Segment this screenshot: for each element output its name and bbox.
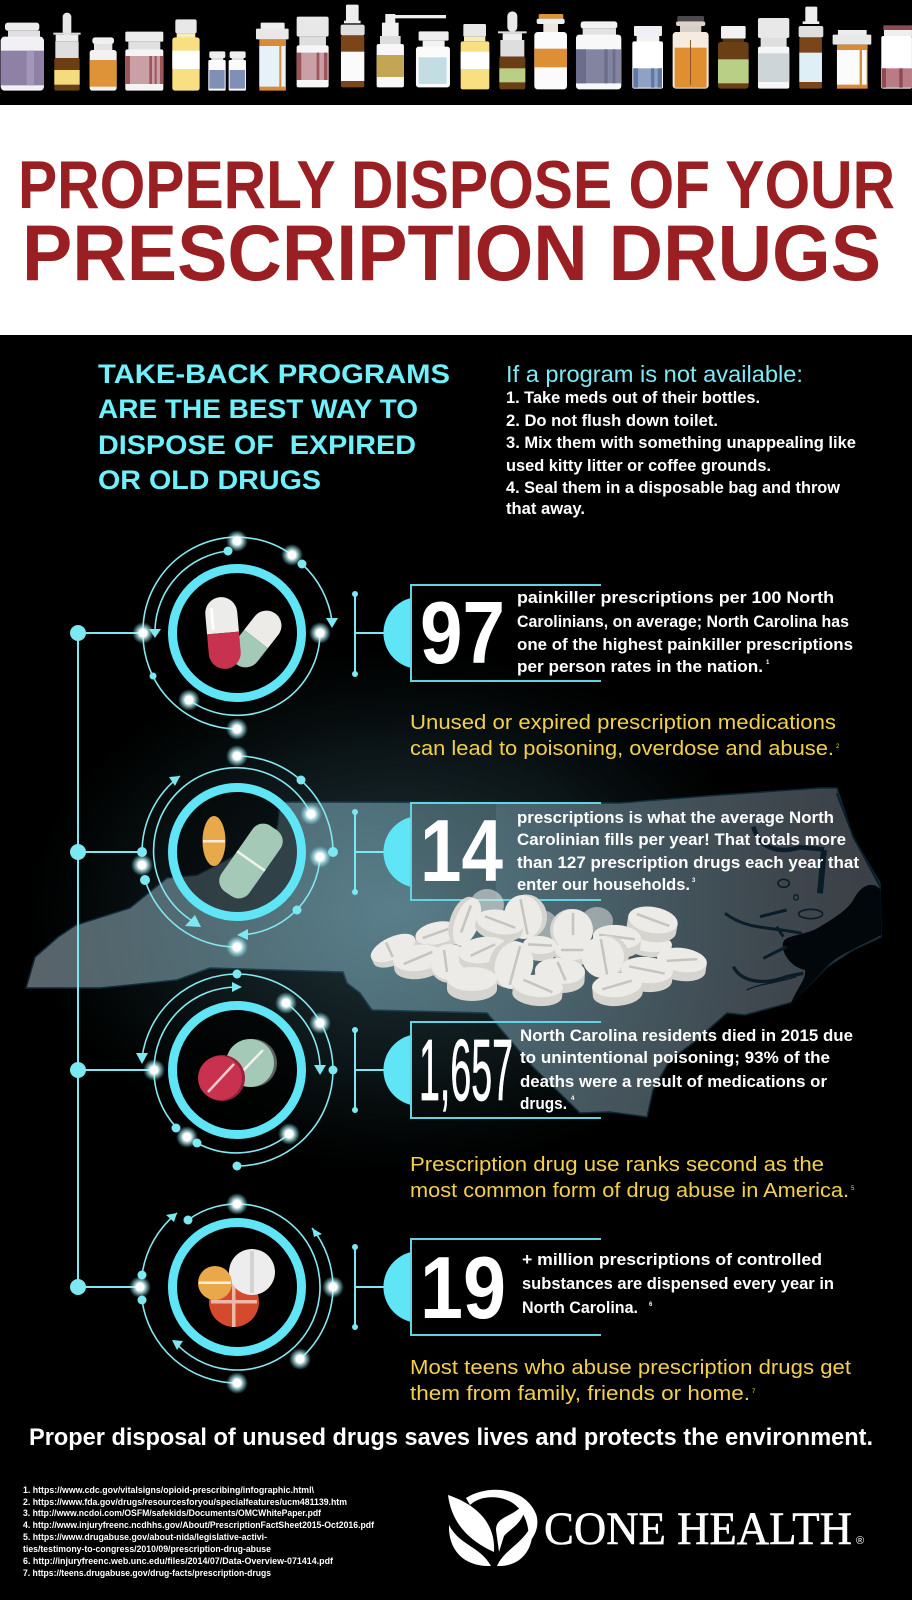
- stat 4: 19: substances are dispensed every year in: [522, 1274, 834, 1293]
- stat 2: 14: than 127 prescription drugs each year that: [517, 853, 859, 872]
- callout: unused medications: Unused or expired prescription medications: [410, 712, 836, 734]
- references list: 7. https://teens.drugabuse.gov/drug-facts/prescription-drugs: [23, 1568, 271, 1578]
- icon ring 1: capsules: [132, 530, 338, 740]
- heading: take-back programs: DISPOSE OF EXPIRED: [98, 430, 416, 460]
- references list: 3. http://www.ncdoi.com/OSFM/safekids/Documents/OMCWhitePaper.pdf: [23, 1508, 322, 1518]
- logo: Cone Health: ®: [856, 1535, 864, 1547]
- stat 1: 97: per person rates in the nation.: [517, 657, 763, 676]
- stat 3: 1,657: deaths were a result of medications or: [520, 1072, 827, 1091]
- stat 1: 97: one of the highest painkiller prescriptions: [517, 635, 853, 654]
- references list: [23, 1485, 375, 1578]
- icon: red cross tablet: [209, 1277, 259, 1327]
- icon: green tablet: [226, 1039, 277, 1087]
- references list: 2. https://www.fda.gov/drugs/resourcesforyou/specialfeatures/ucm481139.htm: [23, 1497, 347, 1507]
- stat 3: 1,657: North Carolina residents died in 2015 due: [520, 1026, 853, 1045]
- stat 3: 1,657: drugs.: [520, 1094, 567, 1113]
- stat 2: 14: 14: [420, 801, 503, 900]
- stat 2: 14: 3: [692, 878, 696, 884]
- map: North Carolina silhouette with glow: [26, 650, 881, 1170]
- stat 3: 1,657: [352, 1022, 853, 1119]
- stat 3: 1,657: 4: [571, 1096, 575, 1102]
- icon: white tablet: [229, 1249, 275, 1295]
- references list: 4. http://www.injuryfreenc.ncdhhs.gov/About/PrescriptionFactSheet2015-Oct2016.pdf: [23, 1520, 375, 1530]
- stat 2: 14: prescriptions is what the average North: [517, 808, 834, 827]
- icon: red capsule: [204, 596, 242, 670]
- text block: if a program is not available: [506, 361, 856, 518]
- closing statement: Proper disposal of unused drugs saves lives and protects the environment.: [29, 1424, 873, 1451]
- stat 4: 19: 19: [420, 1238, 506, 1337]
- text block: if a program is not available: that away.: [506, 499, 585, 518]
- callout: unused medications: 2: [836, 744, 840, 750]
- callout: unused medications: can lead to poisoning, overdose and abuse.: [410, 738, 834, 760]
- icon: green capsule: [224, 605, 288, 673]
- logo: Cone Health: [448, 1490, 864, 1566]
- stat 3: 1,657: 1,657: [419, 1022, 513, 1119]
- callout: most teens: them from family, friends or home.: [410, 1383, 750, 1405]
- icon ring 4: three tablets: [129, 1193, 344, 1394]
- stat 4: 19: [352, 1238, 834, 1337]
- stat 2: 14: Carolinian fills per year! That totals more: [517, 830, 846, 849]
- title: PRESCRIPTION DRUGS: [22, 208, 881, 297]
- icon: orange tablet: [198, 1266, 232, 1300]
- text block: if a program is not available: If a program is not available:: [506, 361, 803, 387]
- text block: if a program is not available: used kitty litter or coffee grounds.: [506, 456, 771, 475]
- callout: drug use ranks second: [410, 1154, 855, 1202]
- panel: white title band: [0, 105, 912, 335]
- icon: orange oval pill: [202, 816, 226, 866]
- references list: 6. http://injuryfreenc.web.unc.edu/files/2014/07/Data-Overview-071414.pdf: [23, 1556, 334, 1566]
- references list: ties/testimony-to-congress/2010/09/prescription-drug-abuse: [23, 1544, 271, 1554]
- stat 1: 97: 97: [420, 583, 505, 682]
- panel: medicine bottle strip: [0, 0, 912, 105]
- connector: vertical spine: [70, 625, 154, 1295]
- title: [18, 147, 895, 297]
- text block: if a program is not available: 2. Do not flush down toilet.: [506, 411, 718, 430]
- heading: take-back programs: ARE THE BEST WAY TO: [98, 394, 418, 424]
- callout: most teens: 7: [752, 1389, 756, 1395]
- stat 1: 97: painkiller prescriptions per 100 North: [517, 588, 834, 607]
- heading: take-back programs: OR OLD DRUGS: [98, 465, 321, 495]
- icon: green tablet: [214, 818, 288, 904]
- callout: most teens: Most teens who abuse prescription drugs get: [410, 1357, 851, 1379]
- stat 4: 19: 6: [649, 1302, 653, 1308]
- stat 3: 1,657: to unintentional poisoning; 93% of the: [520, 1048, 830, 1067]
- stat 1: 97: [352, 583, 853, 682]
- text block: if a program is not available: 3. Mix them with something unappealing like: [506, 433, 856, 452]
- callout: unused medications: [410, 712, 840, 760]
- logo: Cone Health: CONE HEALTH: [544, 1503, 852, 1555]
- icon ring 3: round tablets: [136, 970, 338, 1170]
- text block: if a program is not available: 4. Seal them in a disposable bag and throw: [506, 478, 841, 497]
- stat 2: 14: enter our households.: [517, 875, 690, 894]
- illustration: pile of white tablets: [367, 889, 708, 1008]
- icon: red tablet: [198, 1055, 245, 1101]
- callout: drug use ranks second: 5: [851, 1186, 855, 1192]
- stat 1: 97: Carolinians, on average; North Carolina has: [517, 612, 849, 631]
- callout: drug use ranks second: most common form of drug abuse in America.: [410, 1180, 849, 1202]
- stat 2: 14: [352, 801, 859, 900]
- references list: 5. https://www.drugabuse.gov/about-nida/legislative-activi-: [23, 1532, 267, 1542]
- stat 4: 19: + million prescriptions of controlled: [522, 1250, 822, 1269]
- heading: take-back programs: TAKE-BACK PROGRAMS: [98, 359, 450, 389]
- callout: drug use ranks second: Prescription drug use ranks second as the: [410, 1154, 824, 1176]
- references list: 1. https://www.cdc.gov/vitalsigns/opioid-prescribing/infographic.html\: [23, 1485, 314, 1495]
- icon ring 2: oval and long tablet: [131, 745, 338, 958]
- stat 1: 97: 1: [766, 660, 770, 666]
- icon: Cone Health emblem: [448, 1490, 537, 1566]
- stat 4: 19: North Carolina.: [522, 1298, 638, 1317]
- callout: most teens: [410, 1357, 851, 1405]
- heading: take-back programs: [98, 359, 450, 495]
- text block: if a program is not available: 1. Take meds out of their bottles.: [506, 388, 760, 407]
